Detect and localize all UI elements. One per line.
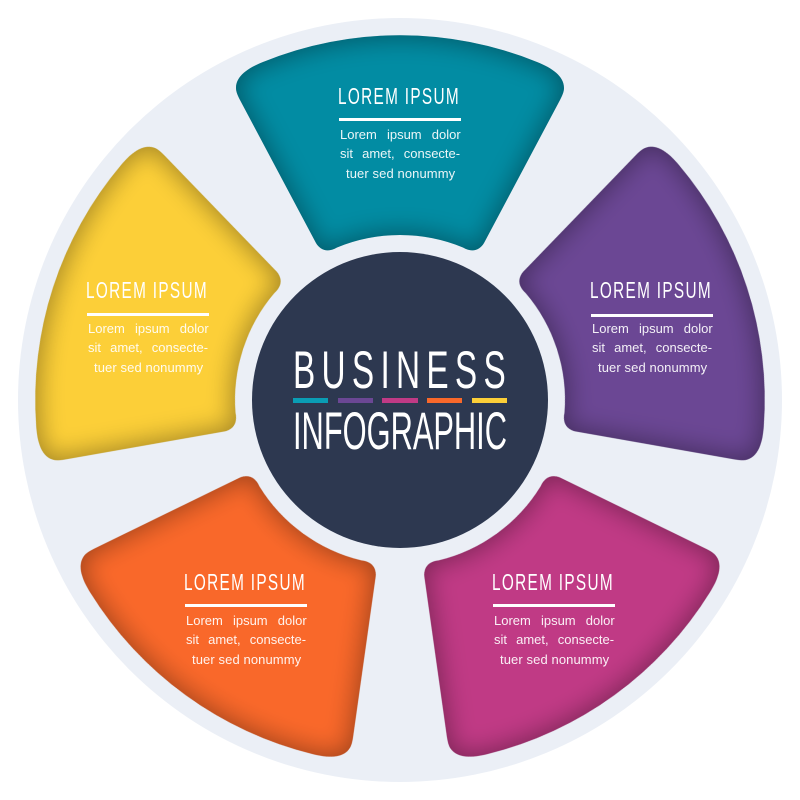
purple body text: sit amet, consecte- [592, 340, 712, 355]
title: infographic: INFOGRAPHIC [293, 402, 507, 461]
teal heading: LOREM IPSUM [338, 83, 460, 109]
magenta body text: sit amet, consecte- [494, 632, 614, 647]
panel: purple segment [492, 131, 798, 510]
teal body text: tuer sed nonummy [346, 166, 456, 181]
orange body text: tuer sed nonummy [192, 652, 302, 667]
purple heading rule [591, 314, 713, 317]
magenta heading rule [493, 604, 615, 607]
magenta heading: LOREM IPSUM [492, 569, 614, 595]
orange heading: LOREM IPSUM [184, 569, 306, 595]
yellow body text: sit amet, consecte- [88, 340, 208, 355]
orange body text: sit amet, consecte- [186, 632, 306, 647]
center circle with title [252, 252, 548, 548]
yellow body text [88, 321, 209, 375]
purple body text: Lorem ipsum dolor [592, 321, 713, 336]
orange heading rule [185, 604, 307, 607]
panel: magenta segment [355, 425, 747, 791]
orange body text [186, 613, 307, 667]
magenta body text: Lorem ipsum dolor [494, 613, 615, 628]
purple body text: tuer sed nonummy [598, 360, 708, 375]
panel: yellow segment [2, 131, 308, 510]
yellow body text: tuer sed nonummy [94, 360, 204, 375]
yellow heading: LOREM IPSUM [86, 277, 208, 303]
teal body text: sit amet, consecte- [340, 146, 460, 161]
yellow body text: Lorem ipsum dolor [88, 321, 209, 336]
teal heading rule [339, 118, 461, 121]
magenta body text: tuer sed nonummy [500, 652, 610, 667]
panel: orange segment [53, 425, 445, 791]
magenta body text [494, 613, 615, 667]
teal body text: Lorem ipsum dolor [340, 127, 461, 142]
teal body text [340, 127, 461, 181]
orange body text: Lorem ipsum dolor [186, 613, 307, 628]
panel: teal segment [236, 35, 564, 250]
yellow heading rule [87, 313, 209, 316]
purple heading: LOREM IPSUM [590, 277, 712, 303]
colour bars [293, 398, 507, 403]
title: business: BUSINESS [293, 341, 512, 400]
purple body text [592, 321, 713, 375]
